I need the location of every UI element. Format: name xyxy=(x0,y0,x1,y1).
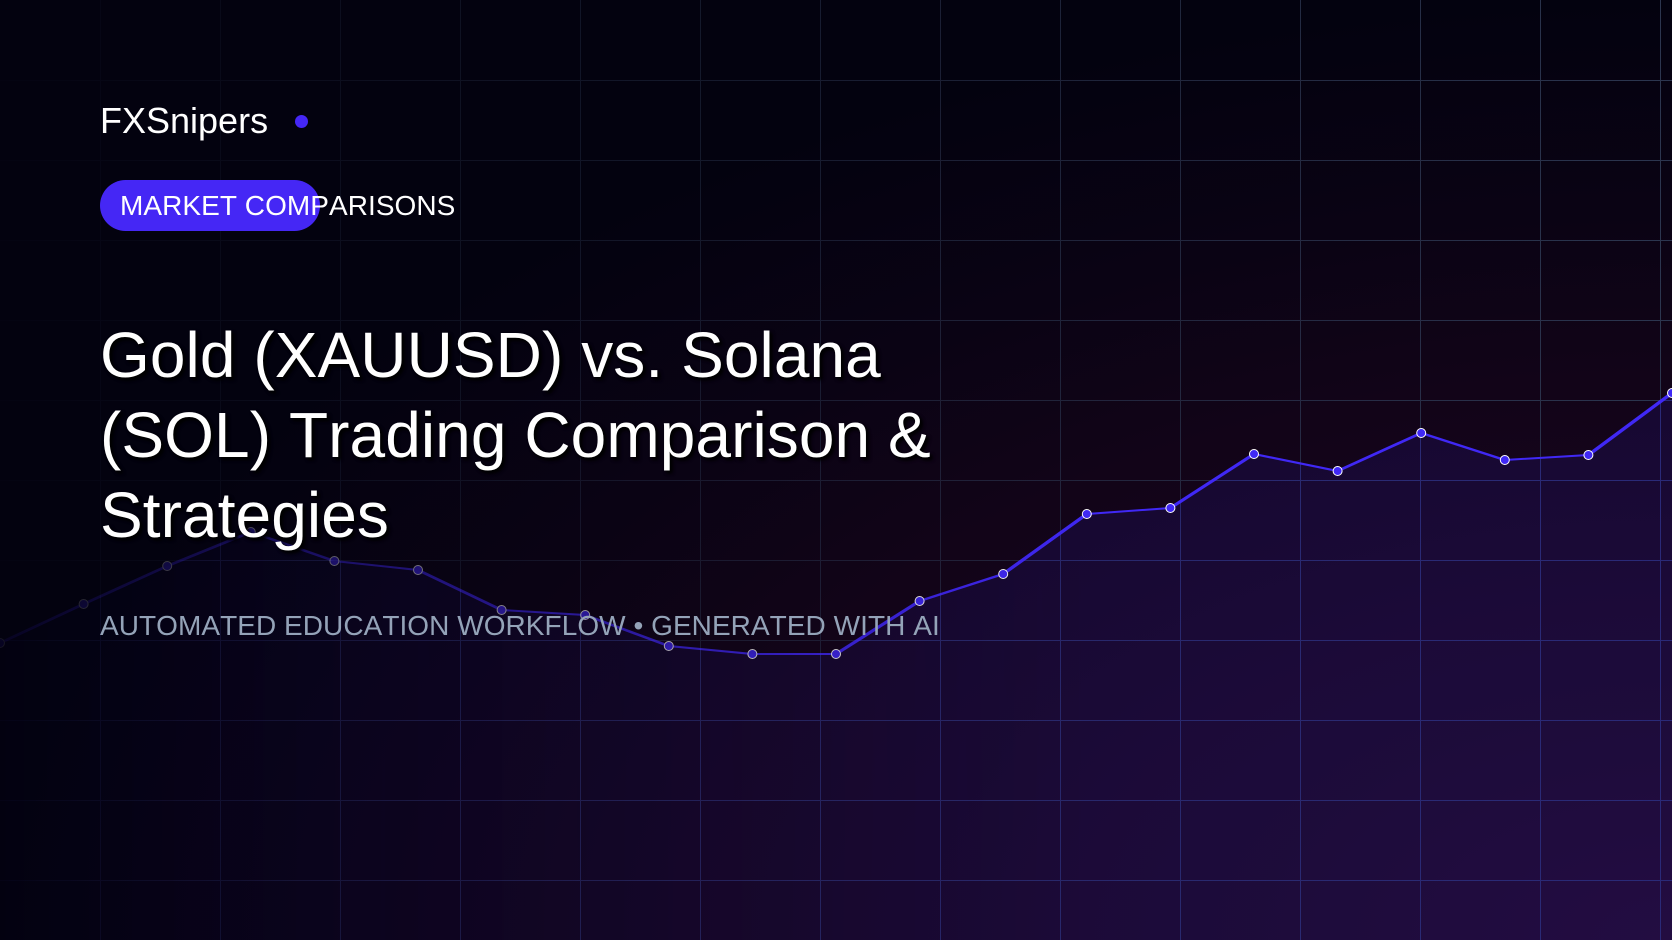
main title xyxy=(100,319,933,554)
category tag text: MARKET COMPARISONS xyxy=(120,190,455,221)
main title: Strategies xyxy=(100,479,389,551)
price line markers xyxy=(0,388,1672,658)
brand logo text: FXSnipers xyxy=(100,100,268,141)
main title: (SOL) Trading Comparison & xyxy=(100,399,931,471)
subtitle: AUTOMATED EDUCATION WORKFLOW • GENERATED WITH AI xyxy=(100,610,940,641)
main title: Gold (XAUUSD) vs. Solana xyxy=(100,319,881,391)
category tag pill xyxy=(100,180,320,231)
price line xyxy=(0,393,1672,654)
area under price line xyxy=(296,397,1672,940)
brand accent dot xyxy=(295,115,308,128)
